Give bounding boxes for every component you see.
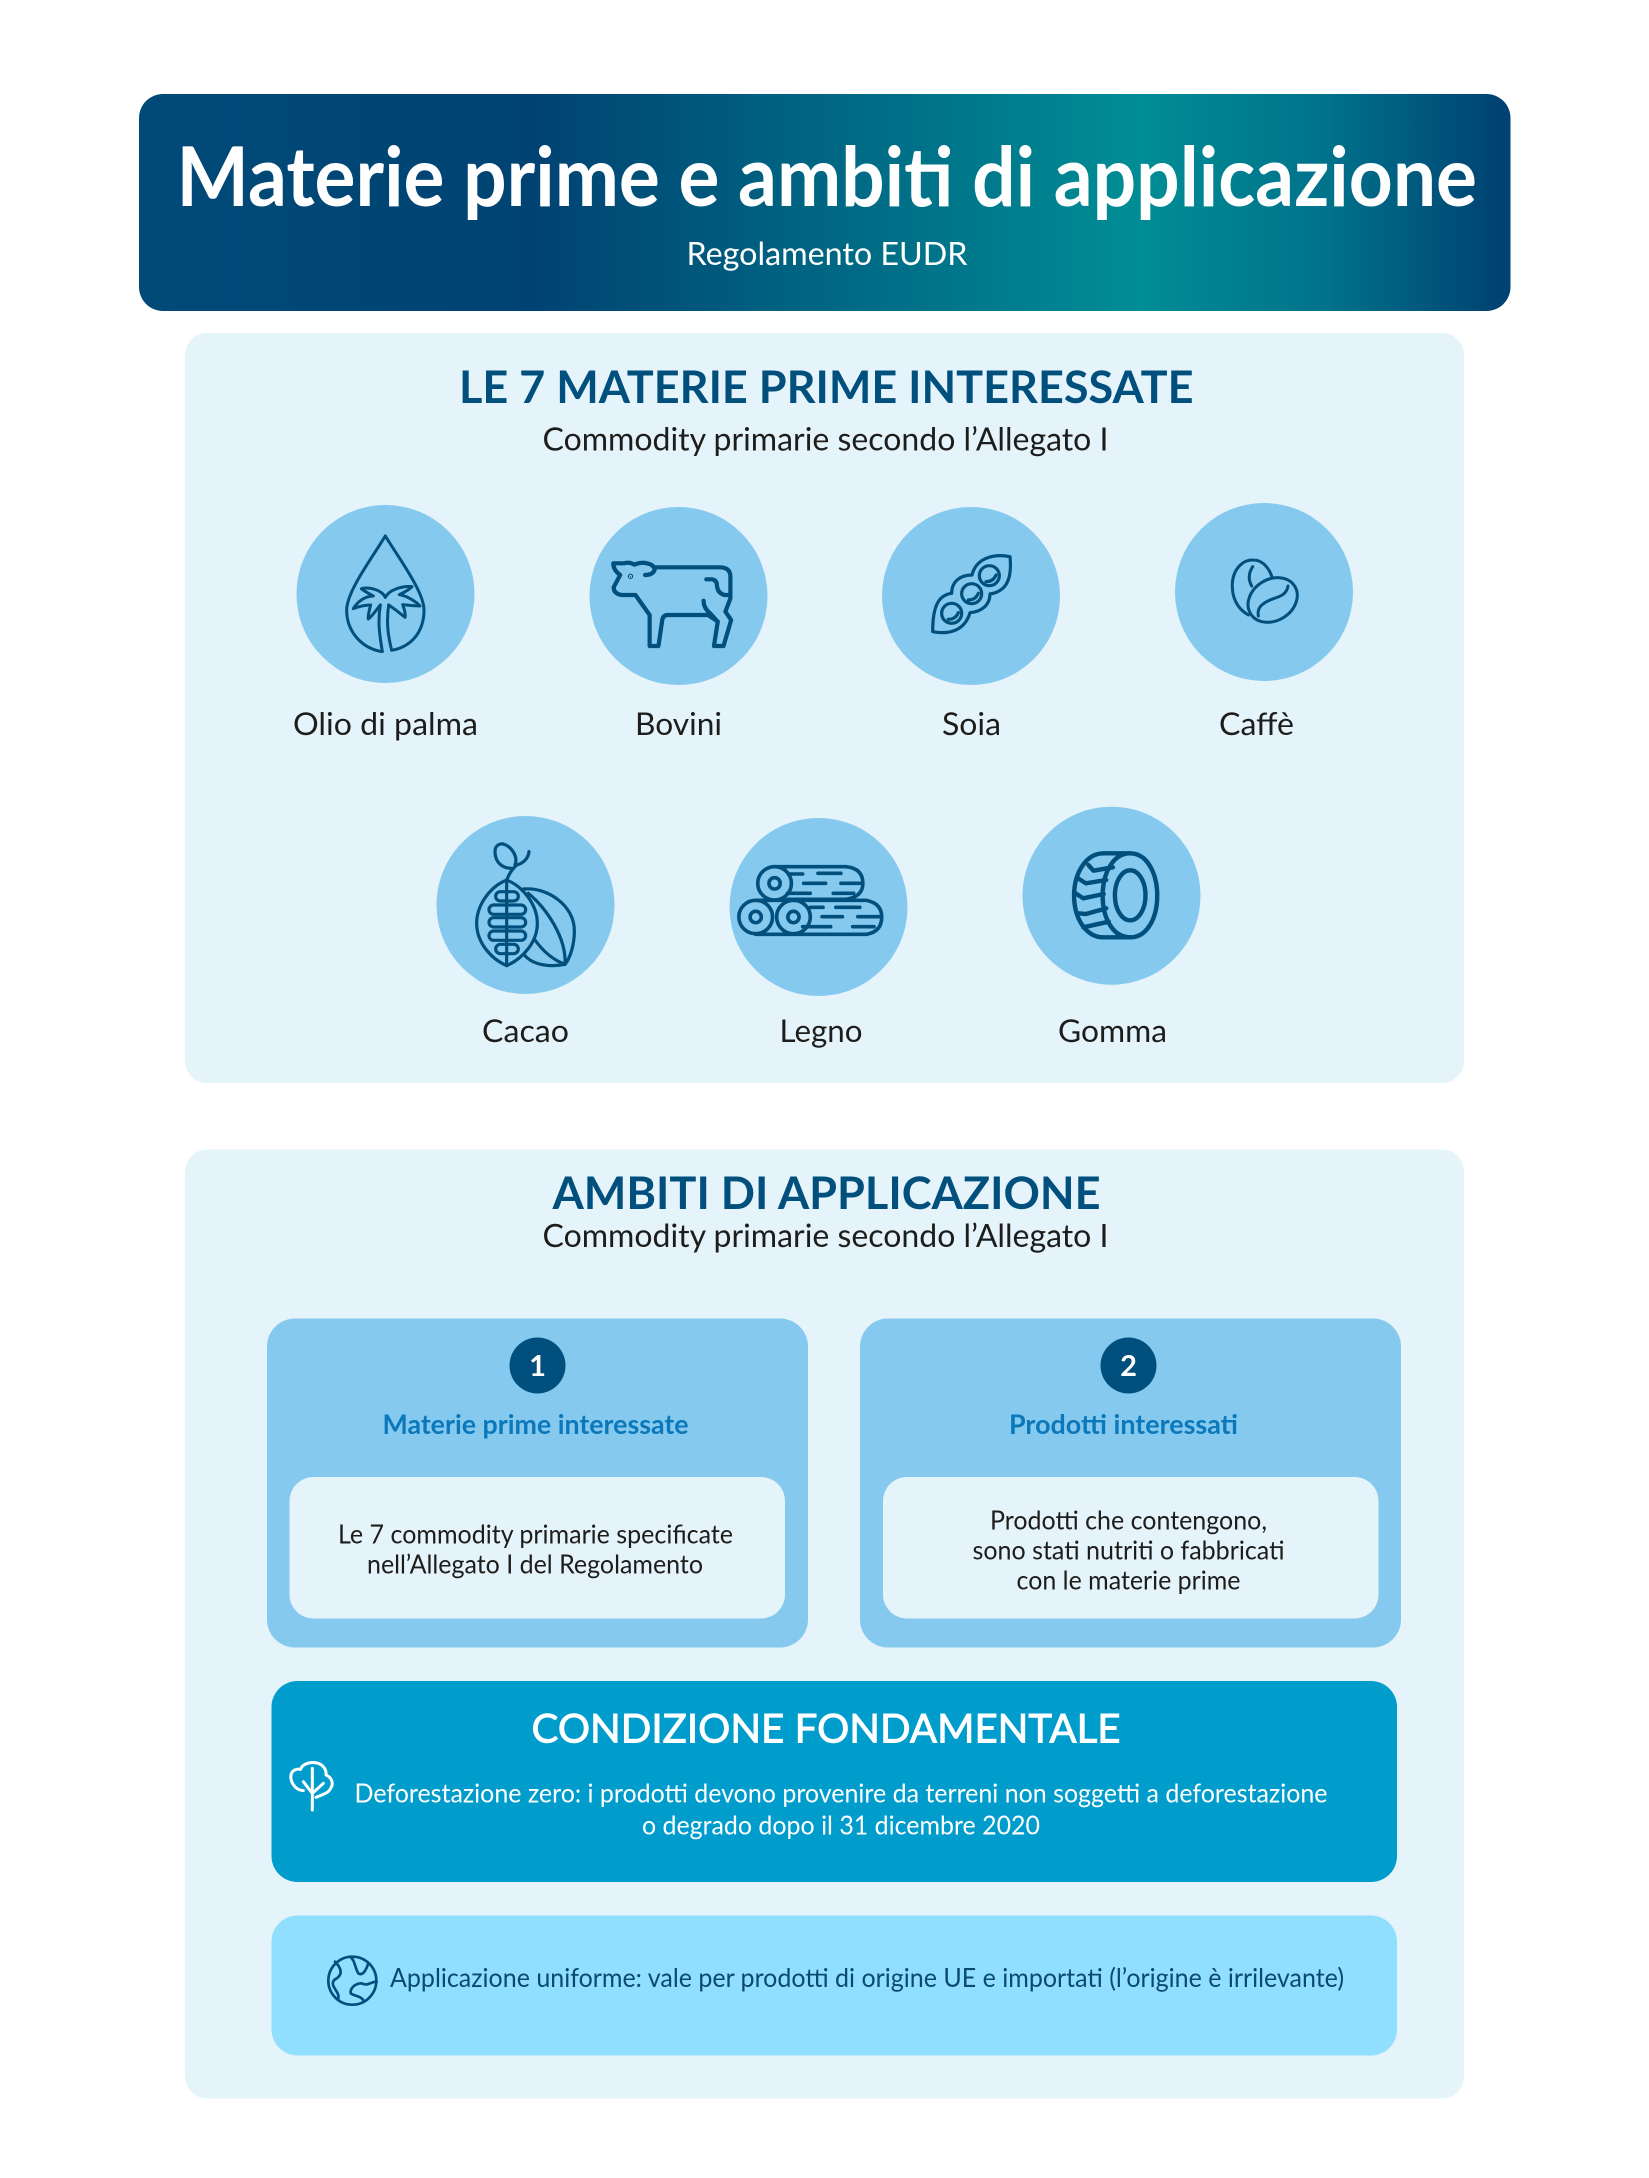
card text box: nell’Allegato I del Regolamento: [367, 1548, 703, 1580]
card text box: Le 7 commodity primarie specificate: [338, 1518, 733, 1550]
number badge 1: 1: [529, 1348, 546, 1383]
card text box: [290, 1477, 785, 1618]
label: Bovini: [635, 704, 722, 742]
commodity: soia: [882, 507, 1060, 742]
icon: logs: [739, 867, 882, 934]
number badge 2: 2: [1120, 1348, 1137, 1383]
card heading: Prodotti interessati: [1009, 1407, 1238, 1440]
card 1: materie prime interessate: [267, 1318, 808, 1648]
icon: soybean pod: [933, 556, 1010, 633]
panel subheading: Commodity primarie secondo l’Allegato I: [542, 418, 1108, 458]
panel heading: AMBITI DI APPLICAZIONE: [551, 1165, 1100, 1219]
callout text: [354, 1776, 1328, 1840]
label: Gomma: [1058, 1011, 1167, 1049]
commodity: cacao: [436, 816, 614, 1049]
callout text: Deforestazione zero: i prodotti devono provenire da terreni non soggetti a deforestazione: [354, 1776, 1328, 1808]
icon: palm oil drop: [347, 536, 424, 652]
label: Caffè: [1219, 704, 1294, 742]
panel heading: LE 7 MATERIE PRIME INTERESSATE: [459, 359, 1194, 413]
card heading: Materie prime interessate: [382, 1407, 688, 1440]
card text box: con le materie prime: [1016, 1564, 1240, 1596]
commodity: legno: [730, 818, 908, 1049]
panel: le 7 materie prime: [185, 333, 1464, 1083]
icon: cow: [613, 563, 731, 646]
panel: ambiti di applicazione: [185, 1150, 1464, 2098]
header banner: [139, 94, 1510, 311]
card text box: Prodotti che contengono,: [990, 1504, 1267, 1536]
label: Cacao: [482, 1011, 569, 1049]
panel subheading: Commodity primarie secondo l’Allegato I: [542, 1215, 1108, 1254]
icon: tree: [291, 1762, 332, 1810]
icon: tyre: [1074, 853, 1157, 937]
number badge 1: [510, 1338, 566, 1394]
commodity: gomma: [1022, 807, 1200, 1049]
label: Soia: [942, 704, 1001, 742]
icon: globe: [328, 1957, 377, 2005]
callout text: o degrado dopo il 31 dicembre 2020: [642, 1808, 1040, 1840]
title: Materie prime e ambiti di applicazione: [176, 126, 1477, 224]
subtitle: Regolamento EUDR: [686, 233, 968, 272]
commodity: caffe: [1175, 503, 1353, 742]
commodity: olio di palma: [293, 505, 478, 742]
icon: coffee beans: [1232, 560, 1306, 631]
callout: condizione fondamentale: [272, 1681, 1397, 1882]
callout: applicazione uniforme: [272, 1916, 1397, 2056]
callout text: Applicazione uniforme: vale per prodotti di origine UE e importati (l’origine è irrilevante): [390, 1961, 1344, 1993]
card text box: sono stati nutriti o fabbricati: [972, 1534, 1284, 1566]
card 2: prodotti interessati: [860, 1318, 1401, 1648]
label: Legno: [780, 1011, 862, 1049]
number badge 2: [1100, 1338, 1156, 1394]
callout heading: CONDIZIONE FONDAMENTALE: [532, 1704, 1120, 1752]
commodity: bovini: [590, 507, 768, 742]
card text box: [883, 1477, 1378, 1618]
icon: cocoa pod: [477, 844, 574, 966]
label: Olio di palma: [293, 704, 478, 742]
